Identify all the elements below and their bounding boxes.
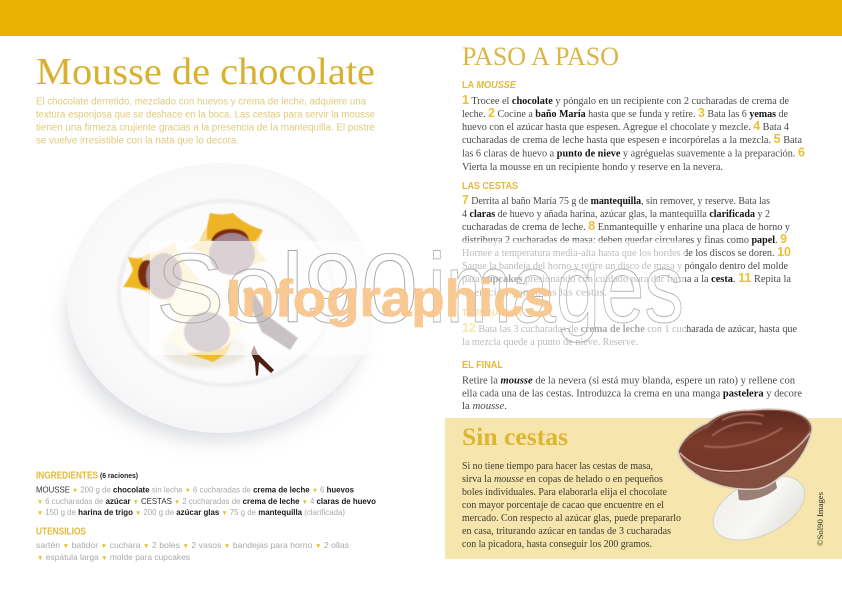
final instructions xyxy=(462,376,802,412)
steps 1 to 6: las 6 claras de huevo a punto de nieve y agréguelas suavemente a la preparación. 6 xyxy=(462,146,805,160)
mousse xyxy=(680,411,809,473)
heading: paso a paso: PASO A PASO xyxy=(462,42,619,71)
panel text: mercado. Con respecto al azúcar glas, puede prepararlo xyxy=(462,513,681,524)
watermark: sol90: Sol90 xyxy=(156,233,418,343)
ingredients list xyxy=(36,484,376,517)
mousse swirls xyxy=(704,414,782,447)
intro text: El chocolate derretido, mezclado con huevos y crema de leche, adquiere una xyxy=(36,96,366,108)
panel text: sirva la mousse en copas de helado o en pequeños xyxy=(462,474,663,485)
subheading: TERMINACIÓN xyxy=(462,306,522,319)
steps 7 to 11: cucharadas de crema de leche. 8 Enmantequille y enharine una placa de horno y xyxy=(462,219,791,233)
watermark: images: images xyxy=(428,233,684,343)
ingredients list: ▼ 6 cucharadas de azúcar ▼ CESTAS ▼ 2 cucharadas de crema de leche ▼ 4 claras de huevo xyxy=(37,496,376,506)
panel text: con la picadora, hasta conseguir los 200 gramos. xyxy=(462,539,652,550)
foot xyxy=(703,463,815,553)
steps 7 to 11: Saque la bandeja del horno y retire un disco de masa y póngalo dentro del molde xyxy=(462,261,788,272)
title: Mousse de chocolate xyxy=(36,51,375,93)
section: la nata xyxy=(462,306,797,348)
watermark xyxy=(150,233,685,355)
watermark: infographics: Infographics xyxy=(226,270,554,328)
photo credit: ©Sol90 Images xyxy=(815,492,825,546)
utensils list: sartén ▼ batidor ▼ cuchara ▼ 2 boles ▼ 2 vasos ▼ bandejas para horno ▼ 2 ollas xyxy=(36,540,349,550)
ingredients list: MOUSSE ▼ 200 g de chocolate sin leche ▼ 6 cucharadas de crema de leche ▼ 6 huevos xyxy=(36,484,354,494)
stem xyxy=(737,478,777,500)
utensils heading: UTENSILIOS xyxy=(36,526,86,538)
step 12: la mezcla quede a punto de nieve. Reserve. xyxy=(462,337,638,348)
glass rim highlights xyxy=(680,433,810,471)
photo: glass bowl of mousse xyxy=(678,409,815,553)
watermark veil xyxy=(150,241,685,355)
top banner xyxy=(0,0,842,36)
chocolate shaving xyxy=(243,287,298,350)
intro text xyxy=(36,96,375,146)
steps 1 to 6: 1 Trocee el chocolate y póngalo en un recipiente con 2 cucharadas de crema de xyxy=(462,93,789,107)
intro text: textura esponjosa que se deshace en la boca. Las cestas para servir la mousse xyxy=(36,110,375,120)
final instructions: la mousse. xyxy=(462,401,507,412)
steps 1 to 6: Vierta la mousse en un recipiente hondo y reserve en la nevera. xyxy=(462,162,723,173)
steps 7 to 11: 4 claras de huevo y añada harina, azúcar glas, la mantequilla clarificada y 2 xyxy=(462,209,770,220)
section: la mousse xyxy=(462,80,805,173)
steps 7 to 11 xyxy=(462,193,791,298)
subheading: LAS CESTAS xyxy=(462,181,518,192)
steps 1 to 6: leche. 2 Cocine a baño María hasta que se funda y retire. 3 Bata las 6 yemas de xyxy=(462,106,788,120)
steps 1 to 6: huevo con el azúcar hasta que espesen. Agregue el chocolate y mezcle. 4 Bata 4 xyxy=(462,119,789,133)
steps 7 to 11: para cupcakes presionando con cuidado para dar forma a la cesta. 11 Repita la xyxy=(462,271,791,285)
utensils list xyxy=(36,540,349,562)
subheading: EL FINAL xyxy=(462,360,503,371)
ingredients list: ▼ 150 g de harina de trigo ▼ 200 g de azúcar glas ▼ 75 g de mantequilla (clarificada) xyxy=(37,507,345,517)
basket shadows xyxy=(163,332,247,368)
steps 7 to 11: 7 Derrita al baño María 75 g de mantequilla, sin remover, y reserve. Bata las xyxy=(462,193,770,207)
panel: sin cestas xyxy=(445,409,842,559)
basket: left xyxy=(123,242,200,303)
utensils list: ▼ espátula larga ▼ molde para cupcakes xyxy=(37,552,190,562)
panel text: boles individuales. Para elaborarla elija el chocolate xyxy=(462,487,667,498)
steps 7 to 11: Hornee a temperatura media-alta hasta que los bordes de los discos se doren. 10 xyxy=(462,245,791,259)
steps 7 to 11: distribuya 2 cucharadas de masa: deben quedar circulares y finas como papel. 9 xyxy=(462,232,787,246)
subheading: LA MOUSSE xyxy=(462,80,516,91)
plate shadow xyxy=(68,200,364,440)
panel text: con mayor porcentaje de cacao que encuentre en el xyxy=(462,500,664,511)
ingredients block xyxy=(36,470,376,562)
steps 1 to 6 xyxy=(462,93,805,173)
photo: plate with chocolate mousse baskets xyxy=(67,163,375,440)
step 12: 12 Bata las 3 cucharadas de crema de leche con 1 cucharada de azúcar, hasta que xyxy=(462,321,797,335)
panel text xyxy=(462,461,681,550)
section: las cestas xyxy=(462,181,791,298)
basket: top xyxy=(190,213,267,275)
ingredients heading: INGREDIENTES xyxy=(36,470,98,482)
final instructions: ella cada una de las cestas. Introduzca la crema en una manga pastelera y decore xyxy=(462,388,802,400)
intro text: se vuelve irresistible con la nata que lo decora. xyxy=(36,136,239,146)
intro text: tienen una firmeza crujiente gracias a la presencia de la mantequilla. El postre xyxy=(36,122,375,134)
bowl xyxy=(678,409,812,489)
chocolate garnish xyxy=(251,345,274,376)
plate xyxy=(67,163,375,433)
steps 7 to 11: operación con todas las cestas. xyxy=(462,288,607,298)
steps 1 to 6: cucharadas de crema de leche hasta que espesen e incorpórelas a la mezcla. 5 Bata xyxy=(462,132,802,146)
panel text: Si no tiene tiempo para hacer las cestas de masa, xyxy=(462,461,653,472)
section: el final xyxy=(462,360,802,412)
step 12 xyxy=(462,321,797,348)
panel heading: Sin cestas xyxy=(462,424,568,451)
basket: bottom xyxy=(167,280,247,362)
final instructions: Retire la mousse de la nevera (si está muy blanda, espere un rato) y rellene con xyxy=(462,376,795,386)
servings note: (6 raciones) xyxy=(100,473,138,480)
panel text: en casa, triturando azúcar en tandas de 3 cucharadas xyxy=(462,526,671,537)
